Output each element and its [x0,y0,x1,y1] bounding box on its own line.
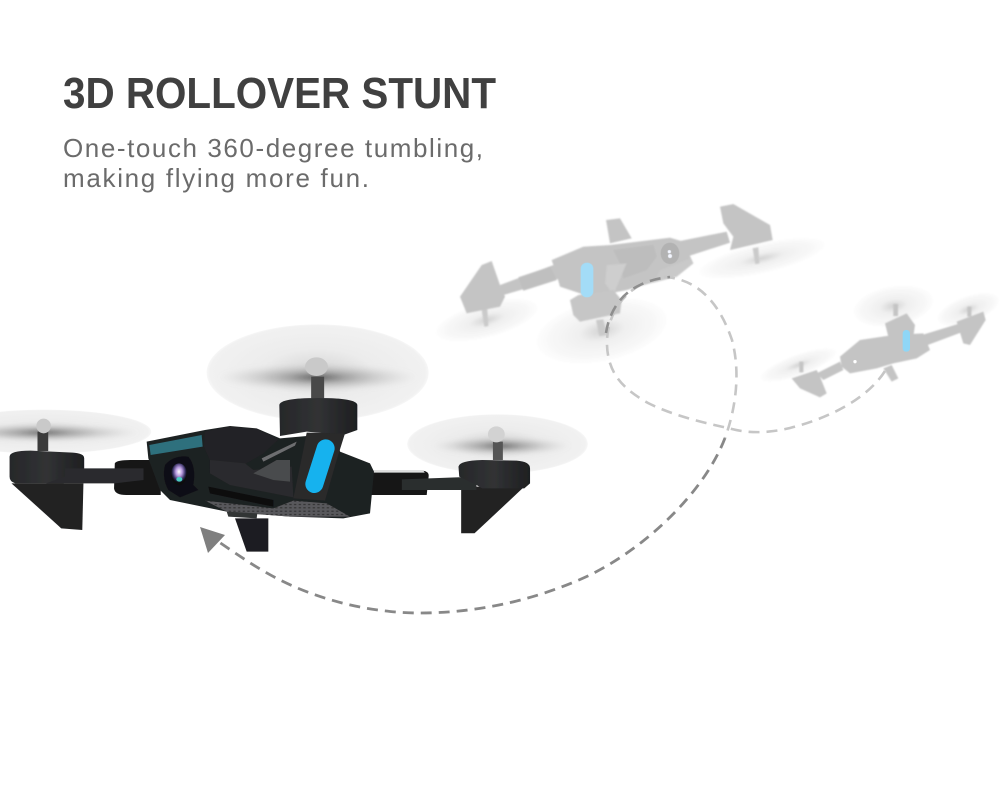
blue light strip [314,448,326,484]
top rotor [207,324,429,421]
upper housing [204,427,278,465]
arrowhead [200,527,225,553]
left rotor [0,410,151,454]
underside vents [205,501,350,517]
right rotor [407,414,588,474]
faded drone: upper position [431,204,829,375]
slot [208,487,273,507]
subtitle: One-touch 360-degree tumbling, [63,133,483,163]
title: 3D ROLLOVER STUNT [63,69,496,118]
central fuselage [147,398,374,552]
rotors [431,229,829,375]
light wedge [253,460,290,482]
blue light strip [903,330,910,352]
camera [164,456,198,497]
blue light strip [581,263,593,297]
main drone [0,324,588,552]
rotor shafts and caps [36,357,505,460]
teal panel [149,435,203,455]
strut [262,442,297,462]
fuselage shell [147,426,374,518]
front arm bracket [293,433,345,501]
subtitle [63,133,483,193]
camera [661,243,679,264]
left arm and foot [10,451,161,530]
centre foot [227,512,268,552]
front motor [279,398,357,436]
right arm and foot [352,460,530,533]
subtitle: making flying more fun. [63,163,369,193]
airframe [460,204,773,336]
outer parts [0,324,588,533]
centre recess [210,460,293,497]
flight path: main dashed curve [219,438,725,613]
rotors [756,279,1000,389]
airframe [792,304,986,397]
flight path: faded section [606,277,885,438]
faded drone: right position [756,279,1000,397]
